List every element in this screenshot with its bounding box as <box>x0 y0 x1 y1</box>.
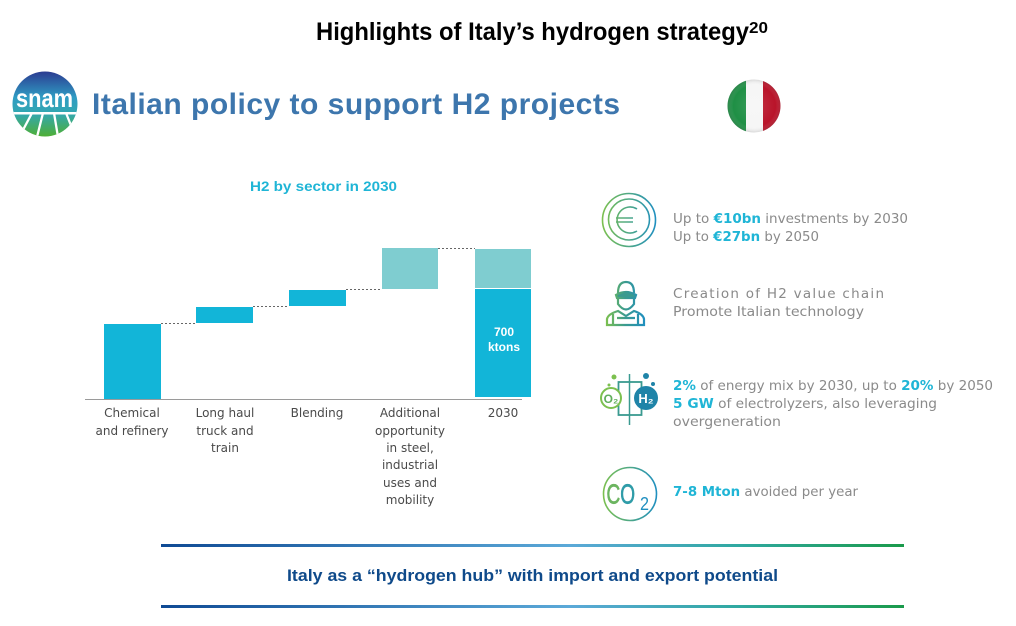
bar: additional opportunity <box>382 248 438 289</box>
title footnote marker: 20 <box>749 20 768 37</box>
bar: blending <box>289 290 346 306</box>
axis label: additional opportunity: industrial <box>382 458 438 472</box>
axis label: long haul truck and train: truck and <box>196 424 254 438</box>
bottom rule <box>161 605 904 608</box>
value chain text: Promote Italian technology <box>673 304 864 320</box>
top rule <box>161 544 904 547</box>
value chain text: Creation of H2 value chain <box>673 286 884 302</box>
heading: Italian policy to support H2 projects <box>92 88 620 121</box>
icon: CO2 <box>604 468 656 520</box>
bar: 2030 base <box>475 289 531 397</box>
investments text: Up to €27bn by 2050 <box>673 229 819 245</box>
chart title: H2 by sector in 2030 <box>250 178 397 194</box>
axis label: 2030: 2030 <box>488 406 518 420</box>
icon: snam logo <box>12 71 78 137</box>
CO2 avoided text: 7-8 Mton avoided per year <box>673 484 858 500</box>
bar: chemical and refinery <box>104 324 161 399</box>
icon: snam logo: snam <box>16 83 73 113</box>
icon: worker <box>607 282 644 325</box>
investments text <box>673 211 908 245</box>
bar value: ktons <box>488 340 520 354</box>
energy mix text <box>673 378 993 430</box>
energy mix text: 2% of energy mix by 2030, up to 20% by 2050 <box>673 378 993 394</box>
icon: CO2: 2 <box>640 494 649 514</box>
axis label: additional opportunity: Additional <box>380 406 440 420</box>
icon: Italian flag <box>727 79 782 133</box>
energy mix text: 5 GW of electrolyzers, also leveraging <box>673 396 937 412</box>
title: Highlights of Italy’s hydrogen strategy <box>316 18 749 46</box>
icon: electrolyzer: O₂ <box>604 392 618 406</box>
waterfall chart <box>85 248 531 400</box>
axis label: chemical and refinery: and refinery <box>95 424 169 438</box>
bar: 2030 additional <box>475 249 531 288</box>
icon: electrolyzer: H₂ <box>638 391 654 406</box>
bar: long haul <box>196 307 253 323</box>
axis label: additional opportunity: in steel, <box>386 441 434 455</box>
conclusion: Italy as a “hydrogen hub” with import and export potential <box>287 566 778 585</box>
axis label: additional opportunity: mobility <box>386 493 434 507</box>
investments text: Up to €10bn investments by 2030 <box>673 211 908 227</box>
axis label: additional opportunity: uses and <box>383 476 437 490</box>
axis label: blending: Blending <box>291 406 343 420</box>
axis label: long haul truck and train: Long haul <box>196 406 254 420</box>
axis label: long haul truck and train: train <box>211 441 239 455</box>
bar value: 700 <box>494 325 514 339</box>
value chain text <box>673 286 884 320</box>
axis label: chemical and refinery: Chemical <box>104 406 160 420</box>
icon: CO2: CO <box>606 479 635 511</box>
icon: euro coin <box>602 194 656 246</box>
energy mix text: overgeneration <box>673 414 781 430</box>
icon: electrolyzer <box>601 373 658 425</box>
axis label: additional opportunity: opportunity <box>375 424 445 438</box>
